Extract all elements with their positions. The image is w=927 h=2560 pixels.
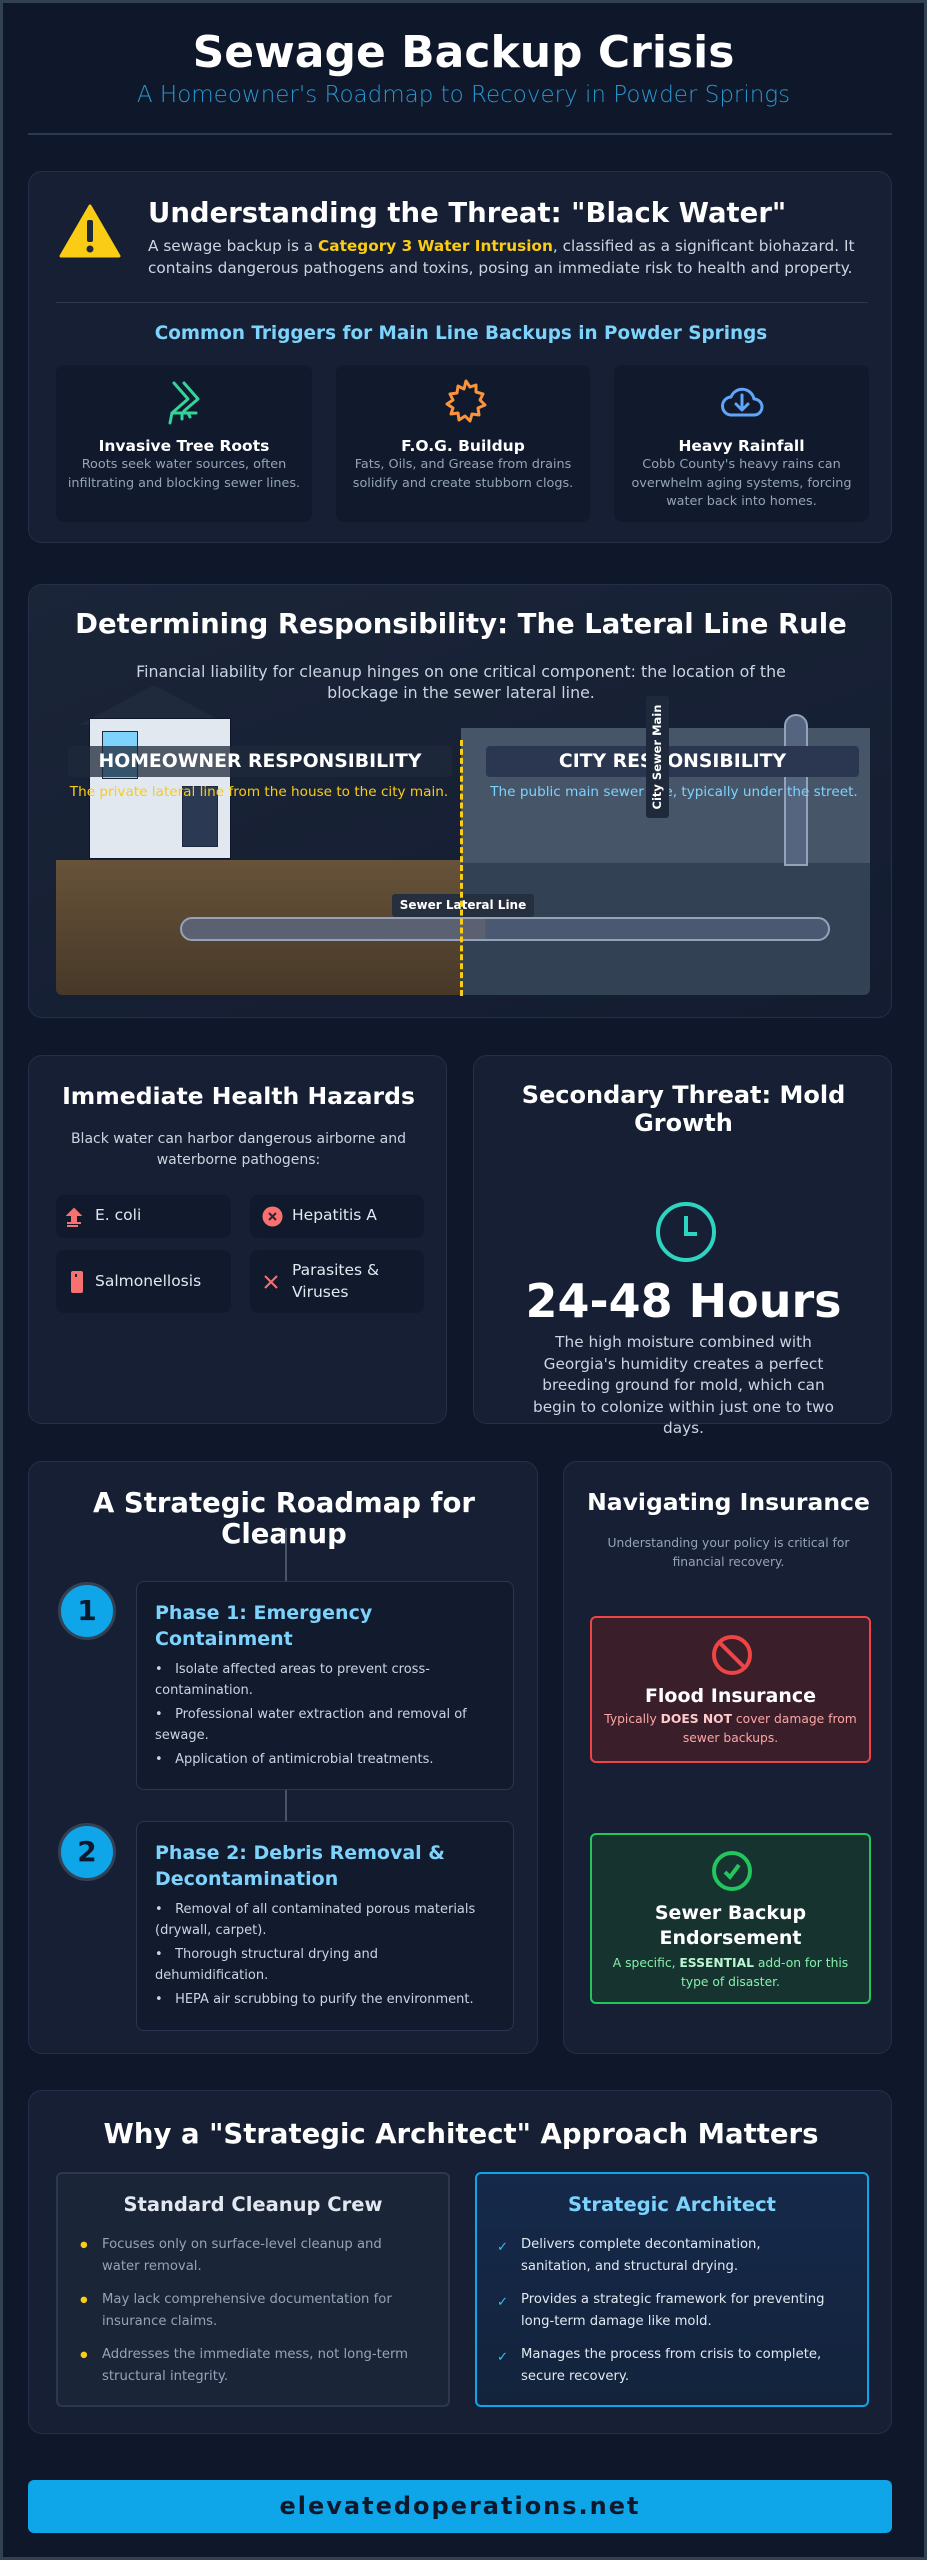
phase 1: • Application of antimicrobial treatments.: [155, 1752, 434, 1767]
column: strategic architect: [475, 2172, 869, 2407]
title: Sewage Backup Crisis: [193, 27, 734, 78]
card: flood insurance: Flood Insurance: [645, 1685, 816, 1707]
card text: Roots seek water sources, often infiltrating and blocking sewer lines.: [68, 457, 300, 490]
panel: insurance: [563, 1461, 892, 2054]
item: salmonellosis: Salmonellosis: [95, 1272, 201, 1290]
step 2 circle: 2: [77, 1835, 97, 1868]
heading: A Strategic Roadmap for Cleanup: [93, 1487, 475, 1550]
item: hepatitis: [250, 1195, 424, 1238]
heading: Navigating Insurance: [587, 1488, 870, 1516]
card text: Cobb County's heavy rains can overwhelm aging systems, forcing water back into homes.: [631, 457, 852, 509]
column: standard crew: ⚫: [78, 2238, 90, 2254]
caption: city: The public main sewer line, typically under the street.: [490, 784, 858, 800]
column: strategic architect: Manages the process from crisis to complete, secure recovery.: [521, 2347, 821, 2384]
lateral pipe: [180, 917, 830, 941]
phase 1: • Professional water extraction and removal of sewage.: [155, 1707, 467, 1743]
label: homeowner responsibility: [68, 746, 452, 777]
phase 2: • Thorough structural drying and dehumidification.: [155, 1947, 378, 1983]
card: tree roots: [56, 365, 312, 522]
dashed boundary: [460, 740, 463, 996]
column: standard crew: ⚫: [78, 2293, 90, 2309]
column: standard crew: Standard Cleanup Crew: [124, 2193, 382, 2216]
window: [102, 731, 138, 779]
subheading: Common Triggers for Main Line Backups in Powder Springs: [155, 323, 767, 344]
phase 1: [136, 1581, 514, 1790]
footer: website: elevatedoperations.net: [279, 2492, 641, 2520]
item: e coli: [56, 1195, 231, 1238]
column: strategic architect: ✓: [497, 2240, 508, 2255]
card: flood insurance: Typically DOES NOT cover damage from sewer backups.: [604, 1712, 857, 1744]
panel: responsibility: [28, 584, 892, 1018]
icon: grease splatter: [445, 380, 487, 422]
card: rainfall: [614, 365, 869, 522]
column: standard crew: May lack comprehensive documentation for insurance claims.: [102, 2292, 392, 2328]
card: sewer backup endorsement: Sewer Backup Endorsement: [655, 1902, 806, 1949]
icon: warning: [60, 204, 121, 258]
icon: prohibited: [712, 1635, 752, 1675]
item: hepatitis: Hepatitis A: [292, 1206, 377, 1224]
panel: understanding the threat: [28, 171, 892, 543]
heading: Why a "Strategic Architect" Approach Matters: [104, 2118, 818, 2150]
heading: Immediate Health Hazards: [62, 1082, 415, 1110]
phase 2: • HEPA air scrubbing to purify the environment.: [155, 1992, 474, 2007]
column: standard crew: Focuses only on surface-level cleanup and water removal.: [102, 2237, 382, 2274]
column: strategic architect: Strategic Architect: [568, 2193, 776, 2216]
text block: Black water can harbor dangerous airborne and waterborne pathogens:: [71, 1131, 406, 1168]
card: sewer backup endorsement: [590, 1833, 871, 2004]
heading: Determining Responsibility: The Lateral Line Rule: [75, 608, 847, 640]
text block: A sewage backup is a Category 3 Water Intrusion, classified as a significant biohazard. It contains dangerous pathogens and toxins, posing an immediate risk to health and property.: [148, 237, 854, 277]
card title: Heavy Rainfall: [678, 437, 805, 455]
card text: Fats, Oils, and Grease from drains solidify and create stubborn clogs.: [353, 457, 573, 490]
panel: why strategic architect: [28, 2090, 892, 2434]
text block: The high moisture combined with Georgia's humidity creates a perfect breeding ground for mold, which can begin to colonize within just one to two days.: [533, 1333, 834, 1437]
roof shadow: [79, 685, 229, 725]
column: standard crew: Addresses the immediate mess, not long-term structural integrity.: [102, 2347, 408, 2384]
card: flood insurance: [590, 1616, 871, 1763]
diagram: lateral line: [56, 728, 870, 995]
step 2 circle: [58, 1823, 116, 1881]
label: city responsibility: [486, 746, 859, 777]
item: parasites: [250, 1250, 424, 1313]
house: [89, 718, 231, 859]
card: FOG: [336, 365, 590, 522]
column: strategic architect: Delivers complete decontamination, sanitation, and structural drying.: [521, 2237, 761, 2274]
column: strategic architect: Provides a strategic framework for preventing long-term damage like mold.: [521, 2292, 825, 2328]
label: city responsibility: CITY RESPONSIBILITY: [559, 751, 786, 772]
label: homeowner responsibility: HOMEOWNER RESPONSIBILITY: [99, 751, 421, 772]
item: parasites: Parasites &: [292, 1261, 379, 1279]
timeline line: [285, 1528, 287, 1983]
vertical city main pipe: [784, 714, 808, 866]
icon: cloud download: [721, 388, 764, 416]
heading: Understanding the Threat: "Black Water": [148, 197, 786, 229]
item: e coli: E. coli: [95, 1206, 141, 1224]
phase 2: • Removal of all contaminated porous materials (drywall, carpet).: [155, 1902, 475, 1938]
icon: clock: [656, 1202, 716, 1262]
stat: 24-48 Hours: [525, 1274, 842, 1328]
text block: Understanding your policy is critical for financial recovery.: [608, 1536, 849, 1569]
step 1 circle: [58, 1582, 116, 1640]
phase 2: Phase 2: Debris Removal & Decontamination: [155, 1842, 445, 1890]
card title: Invasive Tree Roots: [99, 437, 269, 455]
column: strategic architect: ✓: [497, 2295, 508, 2310]
phase 1: Phase 1: Emergency Containment: [155, 1602, 372, 1650]
label: city sewer main: [646, 696, 669, 818]
door: [182, 786, 218, 847]
icon: roots: [168, 381, 200, 424]
step 1 circle: 1: [77, 1594, 97, 1627]
item: parasites: Viruses: [292, 1283, 348, 1301]
card: sewer backup endorsement: A specific, ESSENTIAL add-on for this type of disaster.: [613, 1956, 848, 1988]
subtitle: A Homeowner's Roadmap to Recovery in Powder Springs: [137, 82, 790, 108]
label: sewer lateral line: Sewer Lateral Line: [400, 898, 526, 912]
panel: health hazards: [28, 1055, 447, 1424]
label: sewer lateral line: [392, 894, 534, 917]
label: city sewer main: City Sewer Main: [650, 705, 664, 809]
footer: website: [28, 2480, 892, 2533]
item: salmonellosis: [56, 1250, 231, 1313]
column: standard crew: [56, 2172, 450, 2407]
column: standard crew: ⚫: [78, 2348, 90, 2364]
text block: Financial liability for cleanup hinges on one critical component: the location of the blockage in the sewer lateral line.: [136, 662, 786, 702]
panel: mold growth: [473, 1055, 892, 1424]
phase 2: [136, 1821, 514, 2031]
panel: roadmap: [28, 1461, 538, 2054]
caption: homeowner: The private lateral line from the house to the city main.: [70, 784, 448, 800]
card title: F.O.G. Buildup: [401, 437, 525, 455]
column: strategic architect: ✓: [497, 2350, 508, 2365]
phase 1: • Isolate affected areas to prevent cross-contamination.: [155, 1662, 430, 1698]
heading: Secondary Threat: Mold Growth: [522, 1081, 845, 1137]
icon: check circle: [712, 1851, 752, 1891]
